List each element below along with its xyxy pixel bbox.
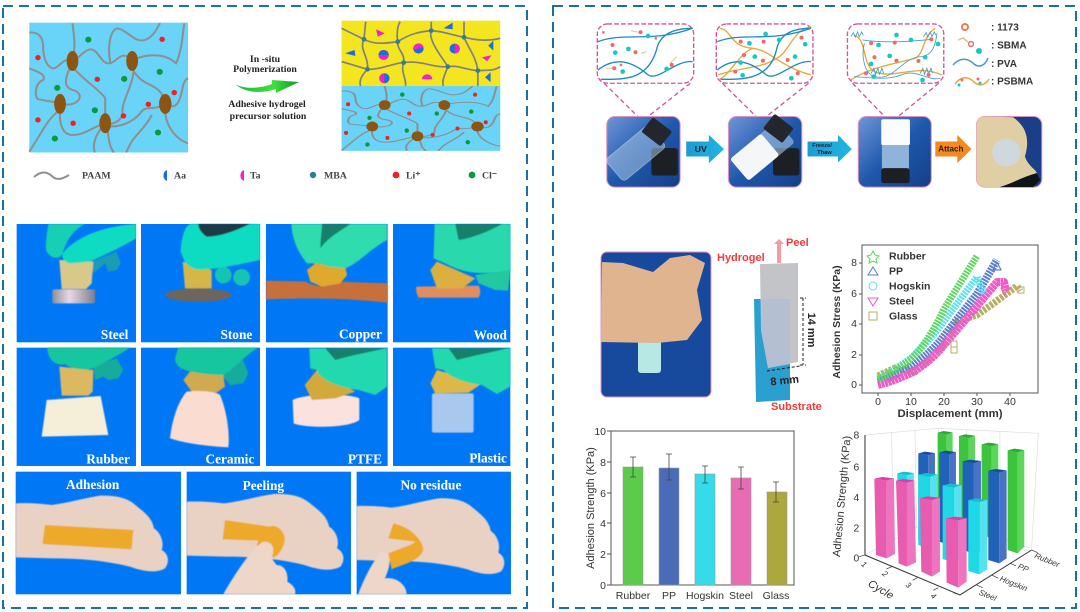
arrow: freeze/thaw: Thaw [817,150,832,156]
photo: plastic [393,348,510,466]
axes labels: 20 [938,396,950,408]
legend: components: MBA [324,170,347,182]
photo: stone [141,224,260,342]
dimension: 8 mm [767,366,800,388]
hydrogel block [760,263,798,368]
arrow: UV [686,135,724,163]
diagram: magnified freeze-thaw network [847,24,944,117]
legend: materials [953,22,1033,88]
axis labels: 8 [600,457,606,469]
axes labels [831,257,1016,420]
dimension: 8 mm: 8 mm [770,374,800,388]
photo group: steel, stone, rubber, ceramic [17,224,260,466]
axis labels: 4 [854,493,860,504]
legend: Hogskin [889,280,930,292]
arrow: UV: UV [695,144,707,154]
text: in-situ polymerization [233,54,297,75]
axis labels: 8 [854,430,860,441]
panel: hydrogel fabrication process [597,22,1042,187]
axis labels: 2 [600,549,606,561]
arrow: freeze/thaw: Freeze/ [812,143,832,149]
bars: hogskin [897,472,987,574]
bars: steel [874,477,967,588]
panel: left dashed frame [3,6,527,608]
photo: wood [393,224,510,342]
axes labels: Displacement (mm) [897,408,1003,420]
axes labels: 30 [971,396,983,408]
axis labels: 3 [904,580,913,590]
panel: right dashed frame [553,6,1076,608]
photo: PTFE [266,348,388,466]
dimension: 14 mm: 14 mm [805,313,817,348]
diagram: magnified PSBMA network [716,24,813,117]
legend: components: Cl⁻ [482,170,497,182]
photo: peeling from hand [187,472,351,594]
photo: ceramic [141,348,260,466]
photo: adhesion on hand [16,472,181,594]
legend: components: PAAM [82,170,111,182]
arrow: freeze/thaw [808,135,852,163]
photo: plastic: Plastic [469,451,507,466]
photo: rubber [17,348,136,466]
axis labels: 0 [854,553,860,564]
legend: components [34,170,497,182]
scatter series [878,256,1024,385]
axes labels: 10 [905,396,917,408]
photo: vial with precursor [605,117,680,187]
text: adhesive hydrogel precursor solution: precursor solution [230,111,307,122]
photo: wood: Wood [474,327,508,342]
axis labels [831,430,1061,603]
axes labels: 40 [1004,396,1016,408]
axis labels: 6 [854,462,860,473]
axis labels: 2 [854,523,860,534]
photo: steel: Steel [101,327,129,342]
legend: components: Aa [174,170,186,182]
axis labels: Adhesion Strength (KPa) [831,435,854,557]
photo group: skin adhesion sequence [16,472,511,594]
axis labels: Rubber [1033,551,1061,569]
axes labels: Adhesion Stress (KPa) [831,265,843,379]
label: hydrogel: Hydrogel [717,252,765,264]
legend: components: Ta [250,170,261,182]
bars: PP [918,451,1007,563]
axis labels: 0 [600,580,606,592]
chart: adhesion stress vs displacement [831,245,1038,420]
arrow: peel direction [774,239,784,263]
diagram: adhesive layer on hydrogel [342,21,500,151]
substrate block [754,299,790,402]
photo: PTFE: PTFE [348,451,382,466]
arrow: green polymerization arrow [235,80,299,93]
text: in-situ polymerization: In -situ [250,54,281,65]
photo: adhesion on hand: Adhesion [66,477,120,492]
axis labels: Steel [978,588,998,603]
legend: materials: : PVA [991,59,1017,70]
axes labels: 6 [851,288,857,300]
axis labels: PP [662,590,676,602]
axis labels: Hogskin [999,574,1029,594]
chart: adhesion strength bars [585,426,794,602]
panel: polymerization schematic [29,21,500,182]
photo: no residue on hand [357,472,511,594]
axis labels: Hogskin [686,590,724,602]
photo: vial with white gel [728,114,802,187]
axes labels: 0 [875,396,881,408]
text: adhesive hydrogel precursor solution [228,99,307,122]
label: substrate: Substrate [771,401,822,413]
axis labels: 4 [929,591,938,601]
axis labels: 1 [859,560,869,569]
photo: no residue on hand: No residue [401,477,461,492]
axis labels: PP [1017,562,1030,574]
arrow: attach [935,135,971,163]
photo: steel [17,224,136,342]
text: in-situ polymerization: Polymerization [233,64,297,75]
axis labels: Adhesion Strength (KPa) [585,447,597,569]
axis labels: Cycle [866,578,896,602]
legend [867,250,930,322]
legend: Glass [889,310,918,322]
error bars [630,454,779,502]
axis labels: 4 [600,518,606,530]
legend: PP [889,266,903,278]
axis labels [585,426,789,602]
photo: hydrogel on hand [977,117,1042,187]
photo: hand with hydrogel hanging [601,252,711,397]
legend: materials: : 1173 [991,22,1019,34]
diagram: lap shear schematic [717,237,822,413]
legend: materials: : SBMA [991,40,1027,52]
legend: Rubber [889,250,926,262]
axis labels: 2 [880,568,890,579]
photo: peeling from hand: Peeling [243,478,284,493]
diagram: precursor solution network [29,23,188,153]
label: peel: Peel [786,237,809,249]
axis labels: 6 [600,488,606,500]
photo: copper [266,224,388,342]
axis labels: Glass [763,590,789,602]
photo: stone: Stone [220,327,252,342]
axis labels: Steel [729,590,753,602]
axis labels: 10 [594,426,606,438]
photo: ceramic: Ceramic [205,451,254,466]
legend: components: Li⁺ [406,170,420,182]
bars [623,467,787,585]
photo: rubber: Rubber [86,451,130,466]
chart frame and walls [865,428,1038,555]
axes labels: 2 [851,349,857,361]
axes labels: 8 [851,257,857,269]
legend: Steel [889,296,914,308]
axes labels: 4 [851,318,857,330]
panel: adhesion photo grid [16,224,511,594]
bars: rubber [938,431,1024,553]
photo: inverted vial with hydrogel [858,117,931,187]
axis labels: Rubber [616,590,651,602]
chart: 3D adhesion strength by cycle [831,428,1061,603]
legend: materials: : PSBMA [991,76,1033,88]
photo: copper: Copper [339,327,382,342]
text: adhesive hydrogel precursor solution: Adhesive hydrogel [228,99,306,110]
dimension: 14 mm [800,298,817,365]
photo group: copper, wood, PTFE, plastic [266,224,510,466]
diagram: magnified precursor network [597,24,694,117]
arrow: attach: Attach [938,145,964,154]
axes labels: 0 [851,379,857,391]
